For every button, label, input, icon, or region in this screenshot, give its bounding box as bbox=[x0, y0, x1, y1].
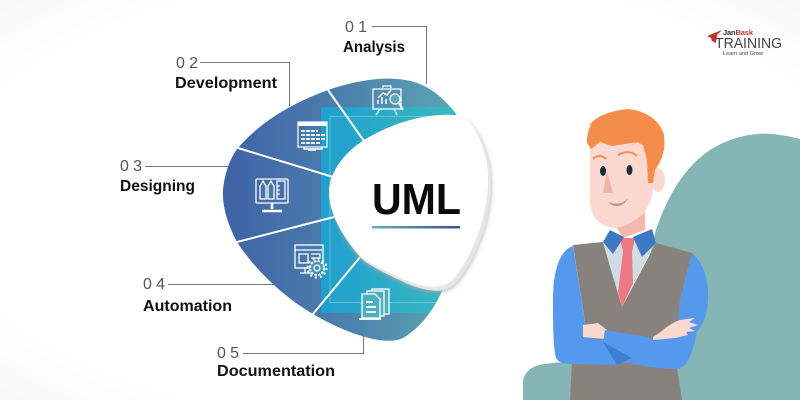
logo: JanBask Training: Learn and Grow bbox=[723, 51, 763, 57]
left hand bbox=[583, 323, 607, 339]
face bbox=[590, 130, 653, 228]
label: 05 Documentation bbox=[217, 345, 335, 380]
leader lines bbox=[145, 26, 426, 354]
centre blob bbox=[329, 115, 488, 287]
label: 04 Automation: Automation bbox=[143, 298, 232, 315]
icon: analysis presentation board bbox=[373, 86, 403, 115]
logo: JanBask Training bbox=[707, 28, 782, 57]
label: 04 Automation bbox=[143, 276, 232, 315]
shirt bbox=[603, 240, 656, 307]
radial fan diagram bbox=[215, 70, 495, 350]
icon: automation monitor and gear bbox=[295, 245, 326, 278]
heading: UML: UML bbox=[372, 175, 461, 224]
tie bbox=[618, 238, 635, 307]
label: 05 Documentation: 0 5 bbox=[217, 345, 239, 362]
label: 02 Development: 0 2 bbox=[176, 55, 198, 72]
neck bbox=[613, 210, 645, 238]
smile bbox=[608, 198, 628, 206]
icon: mortarboard bbox=[707, 30, 722, 43]
label: 04 Automation: 0 4 bbox=[143, 276, 165, 293]
teal backdrop shape lower left bbox=[523, 360, 600, 400]
icon: development code window bbox=[298, 122, 327, 150]
label: 02 Development bbox=[175, 55, 277, 92]
label: 02 Development: Development bbox=[175, 75, 277, 92]
sleeve fold bbox=[603, 342, 632, 365]
fan body bbox=[222, 78, 457, 341]
eyebrows bbox=[593, 152, 637, 159]
label: 03 Designing: Designing bbox=[120, 178, 195, 195]
right hand bbox=[653, 318, 698, 340]
ear bbox=[651, 168, 665, 192]
crossed forearm bbox=[603, 330, 697, 369]
icon: designing monitor with pencils bbox=[256, 179, 288, 211]
segment dividers bbox=[237, 90, 364, 314]
collar bbox=[603, 230, 624, 254]
logo: JanBask Training: TRAINING bbox=[715, 35, 782, 52]
vest bbox=[570, 242, 692, 400]
right upper sleeve bbox=[677, 253, 708, 335]
logo: JanBask Training: JanBask bbox=[723, 28, 754, 37]
character: man with crossed arms bbox=[553, 109, 708, 400]
teal backdrop shape right bbox=[640, 134, 800, 400]
left sleeve bbox=[553, 246, 617, 365]
hair bbox=[587, 109, 665, 183]
nose bbox=[603, 172, 613, 193]
centre blob shadow bbox=[332, 120, 491, 292]
label: 05 Documentation: Documentation bbox=[217, 363, 335, 380]
icon: documentation pages bbox=[359, 289, 389, 319]
label: 03 Designing bbox=[120, 158, 195, 195]
label: 01 Analysis bbox=[343, 19, 405, 56]
label: 03 Designing: 0 3 bbox=[120, 158, 142, 175]
eyes bbox=[600, 166, 606, 176]
inner highlight square bbox=[321, 107, 471, 313]
label: 01 Analysis: Analysis bbox=[343, 39, 405, 56]
centre blob rim bbox=[332, 119, 491, 291]
label: 01 Analysis: 0 1 bbox=[345, 19, 367, 36]
heading underline bbox=[372, 226, 460, 228]
